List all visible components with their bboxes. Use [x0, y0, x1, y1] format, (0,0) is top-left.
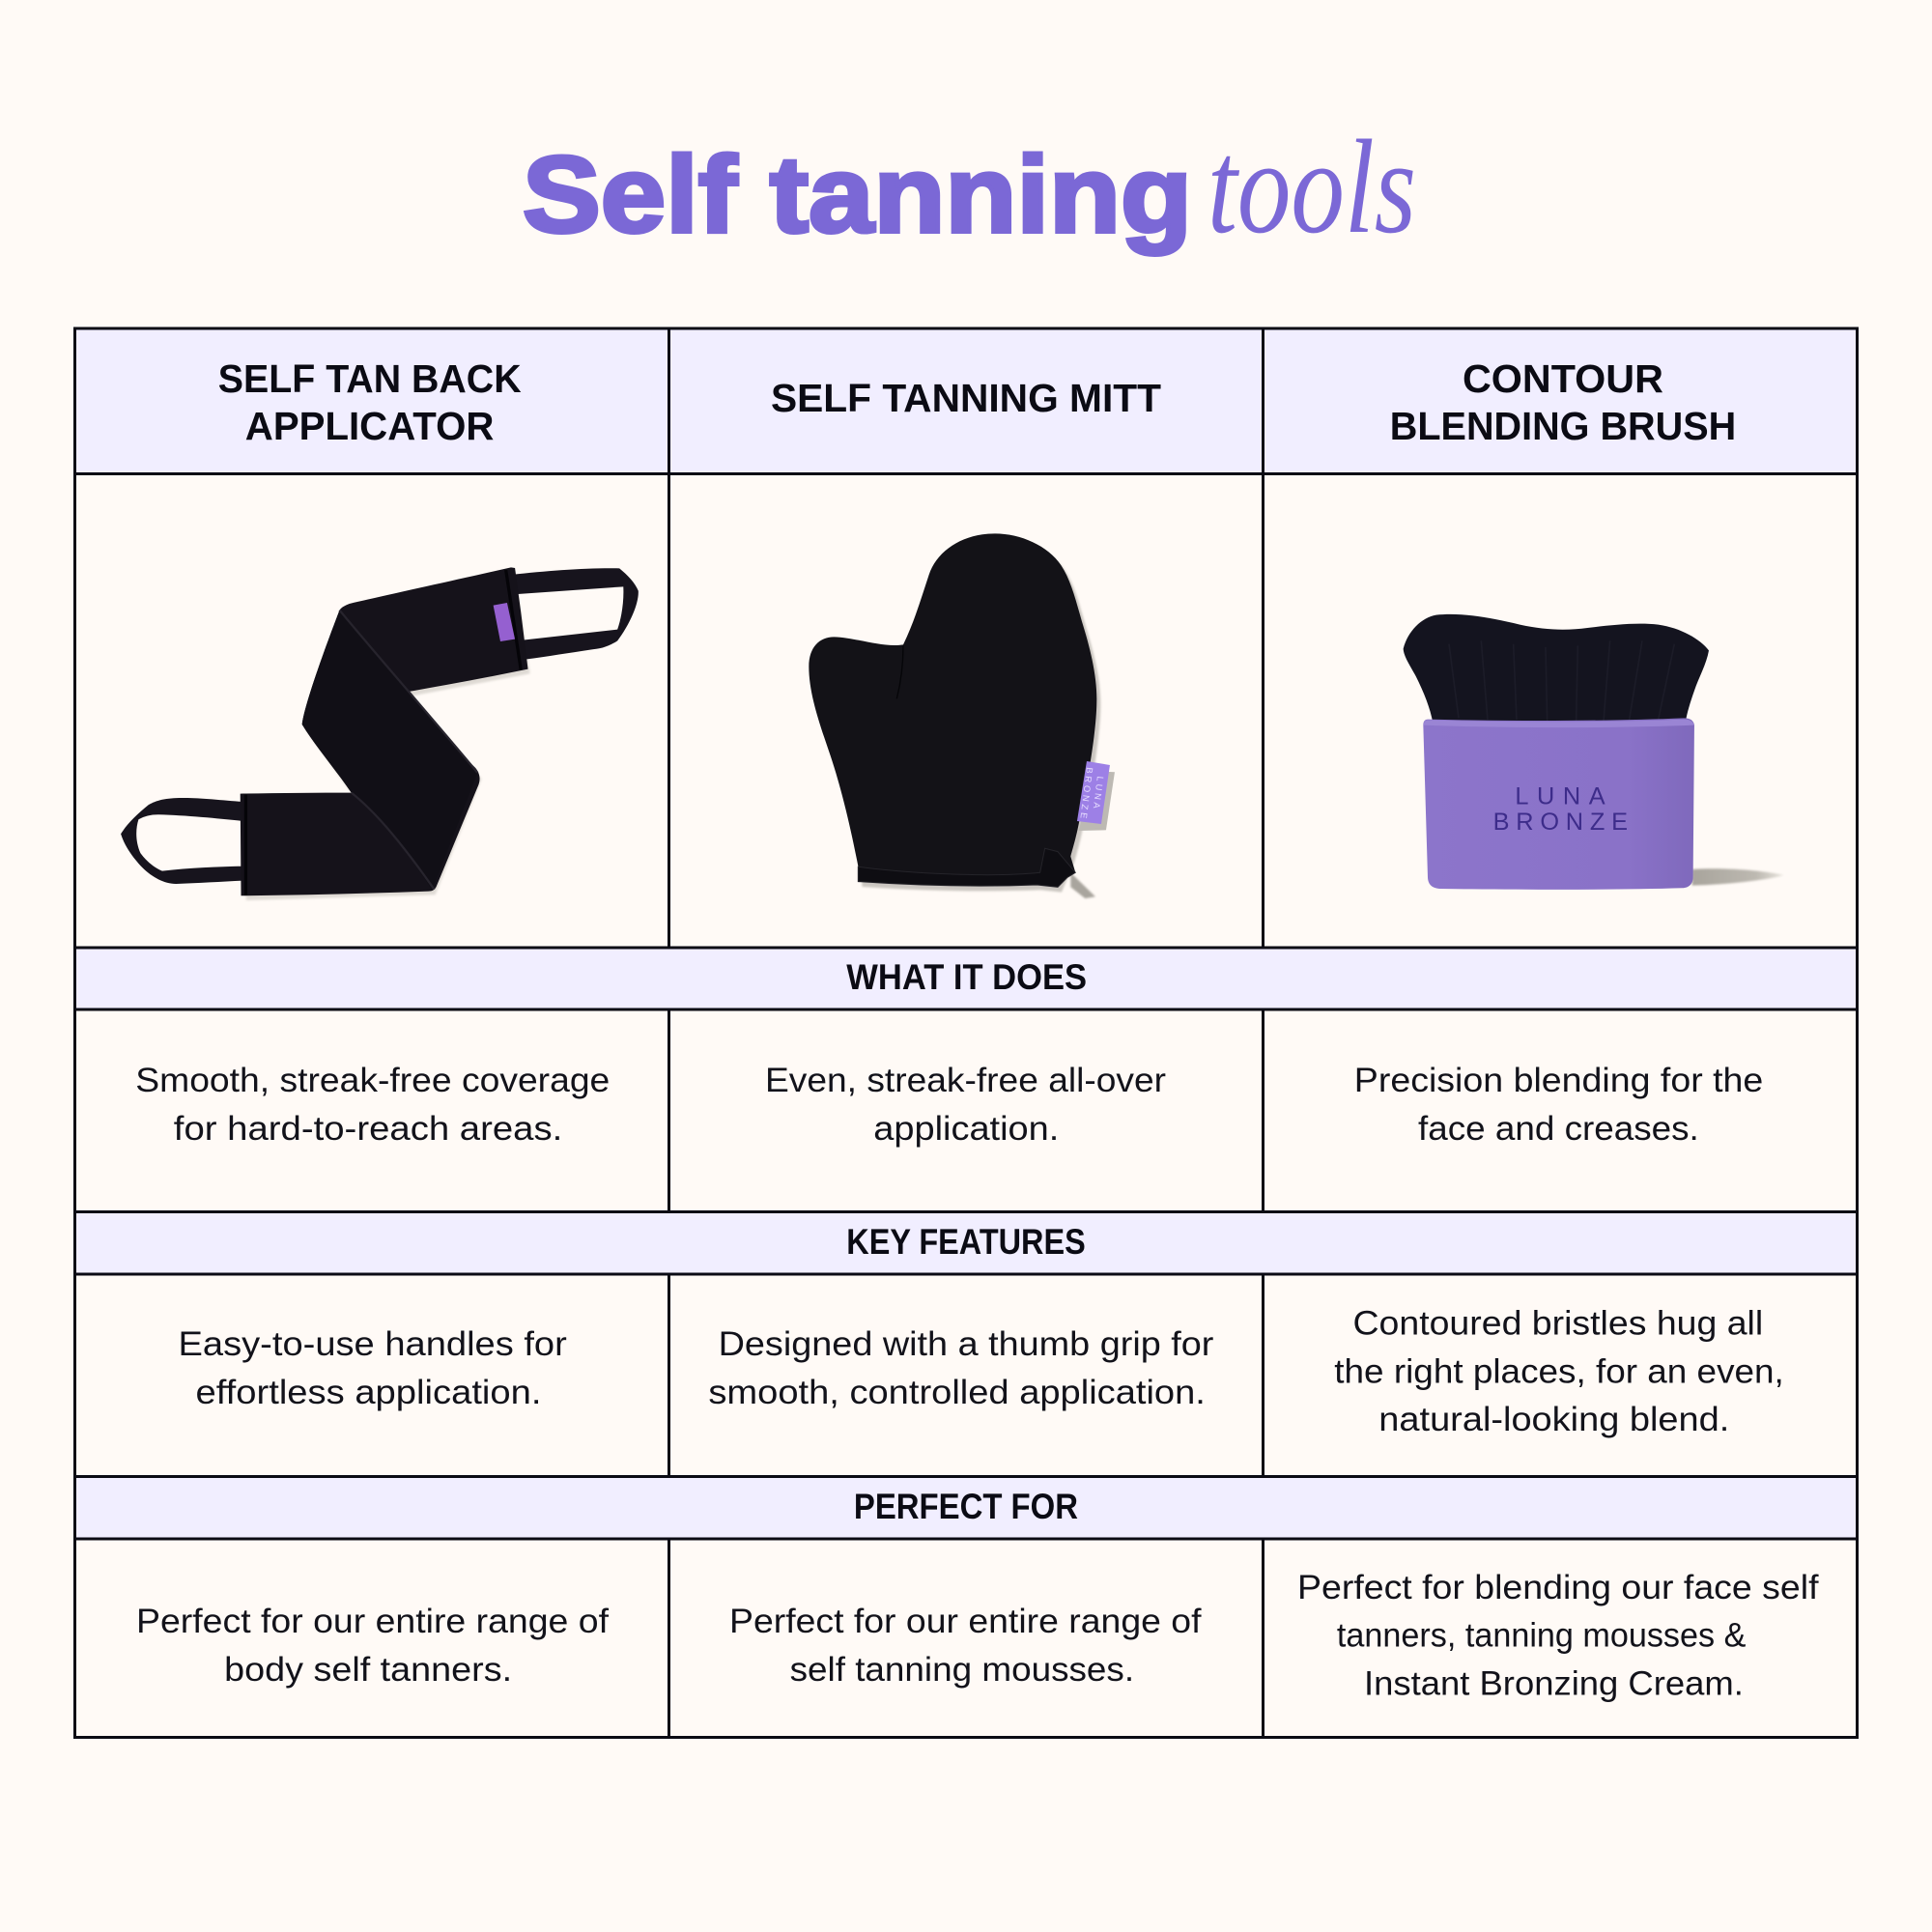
band — [241, 567, 528, 895]
brand text: LUNA — [1515, 782, 1605, 810]
what it does: brush: face and creases. — [1418, 1110, 1699, 1148]
what it does: mitt — [765, 1062, 1166, 1148]
perfect for: brush — [1297, 1569, 1819, 1702]
perfect for: brush: Instant Bronzing Cream. — [1364, 1665, 1744, 1702]
left handle — [121, 798, 243, 884]
column heading: contour blending brush — [1390, 356, 1736, 448]
comparison table — [74, 327, 1858, 1737]
key features: applicator: effortless application. — [195, 1374, 541, 1411]
what it does: applicator — [135, 1062, 610, 1148]
column heading: self tan back applicator: APPLICATOR — [245, 404, 494, 448]
column heading: contour blending brush: CONTOUR — [1463, 356, 1663, 401]
product image: tanning mitt — [809, 533, 1115, 898]
label tag: LUNA — [1092, 776, 1105, 810]
what it does: mitt: application. — [873, 1110, 1059, 1148]
key features: applicator: Easy-to-use handles for — [178, 1325, 567, 1363]
brand text — [1493, 782, 1628, 836]
key features: brush — [1334, 1304, 1784, 1438]
label tag — [494, 603, 515, 641]
bristles — [1404, 614, 1709, 723]
title — [523, 113, 1416, 262]
key features: brush: Contoured bristles hug all — [1352, 1304, 1763, 1343]
what it does: brush — [1354, 1062, 1763, 1148]
what it does: brush: Precision blending for the — [1354, 1062, 1763, 1099]
column heading: self tanning mitt: SELF TANNING MITT — [771, 376, 1161, 420]
column heading: self tan back applicator — [218, 356, 522, 448]
key features: mitt: Designed with a thumb grip for — [719, 1325, 1214, 1363]
handle — [1423, 718, 1694, 890]
perfect for: applicator: body self tanners. — [224, 1651, 512, 1689]
what it does: mitt: Even, streak-free all-over — [765, 1062, 1166, 1099]
perfect for: mitt: Perfect for our entire range of — [729, 1603, 1202, 1640]
what it does: applicator: Smooth, streak-free coverage — [135, 1062, 610, 1099]
perfect for: applicator — [136, 1603, 609, 1689]
label tag: BRONZE — [1078, 767, 1094, 819]
key features: mitt — [708, 1325, 1214, 1411]
perfect for: applicator: Perfect for our entire range of — [136, 1603, 609, 1640]
label tag — [1077, 761, 1115, 831]
right handle — [511, 568, 639, 660]
column heading: self tan back applicator: SELF TAN BACK — [218, 356, 522, 401]
section heading: what it does: WHAT IT DOES — [846, 957, 1087, 997]
product image: back applicator — [121, 567, 639, 900]
key features: brush: the right places, for an even, — [1334, 1352, 1784, 1391]
column heading: contour blending brush: BLENDING BRUSH — [1390, 404, 1736, 448]
product image: blending brush — [1404, 614, 1784, 890]
key features: applicator — [178, 1325, 567, 1411]
section heading: key features: KEY FEATURES — [846, 1222, 1086, 1262]
section heading: perfect for: PERFECT FOR — [854, 1487, 1078, 1526]
perfect for: mitt — [729, 1603, 1202, 1689]
key features: mitt: smooth, controlled application. — [708, 1374, 1206, 1411]
key features: brush: natural-looking blend. — [1378, 1401, 1729, 1438]
brand text: BRONZE — [1493, 809, 1628, 836]
what it does: applicator: for hard-to-reach areas. — [174, 1110, 562, 1148]
title: Self tanning — [523, 134, 1192, 255]
perfect for: brush: Perfect for blending our face self — [1297, 1569, 1819, 1606]
title: tools — [1208, 113, 1416, 262]
perfect for: mitt: self tanning mousses. — [790, 1651, 1134, 1689]
perfect for: brush: tanners, tanning mousses & — [1337, 1617, 1746, 1654]
